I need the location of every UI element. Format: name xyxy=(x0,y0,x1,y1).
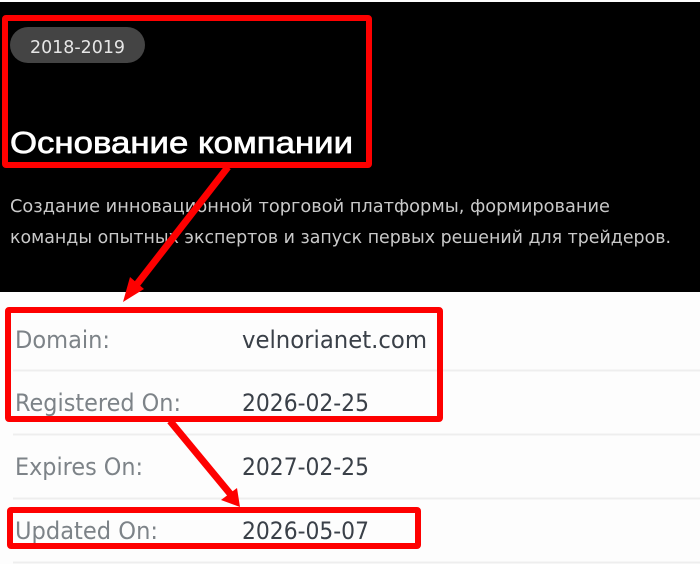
row: updated on xyxy=(15,517,369,545)
badge: period 2018-2019 xyxy=(10,27,145,63)
row: expires on: Expires On: xyxy=(15,453,143,481)
row: expires on xyxy=(15,453,369,481)
row: updated on: 2026-05-07 xyxy=(242,517,369,545)
row: registered on: 2026-02-25 xyxy=(242,389,369,417)
highlight box: domain and registered rows xyxy=(8,310,440,419)
row: domain: Domain: xyxy=(15,326,110,354)
highlight box: updated row xyxy=(10,510,418,546)
badge: period 2018-2019: 2018-2019 xyxy=(30,37,125,58)
heading: company founding: Основание компании xyxy=(10,125,353,160)
text block: description: Создание инновационной торговой платформы, формирование xyxy=(10,196,610,217)
arrow: heading to domain box xyxy=(123,167,228,302)
row: domain: velnorianet.com xyxy=(242,326,427,354)
highlight box: badge and heading xyxy=(5,18,369,165)
text block: description xyxy=(10,196,671,248)
text block: description: команды опытных экспертов и запуск первых решений для трейдеров. xyxy=(10,227,671,248)
arrow: registered to updated row xyxy=(170,421,240,507)
row: domain xyxy=(15,326,427,354)
row: updated on: Updated On: xyxy=(15,517,158,545)
row: expires on: 2027-02-25 xyxy=(242,453,369,481)
row: registered on: Registered On: xyxy=(15,389,181,417)
panel: domain whois table xyxy=(13,326,700,564)
row: registered on xyxy=(15,389,369,417)
panel: dark company history card xyxy=(0,2,700,292)
